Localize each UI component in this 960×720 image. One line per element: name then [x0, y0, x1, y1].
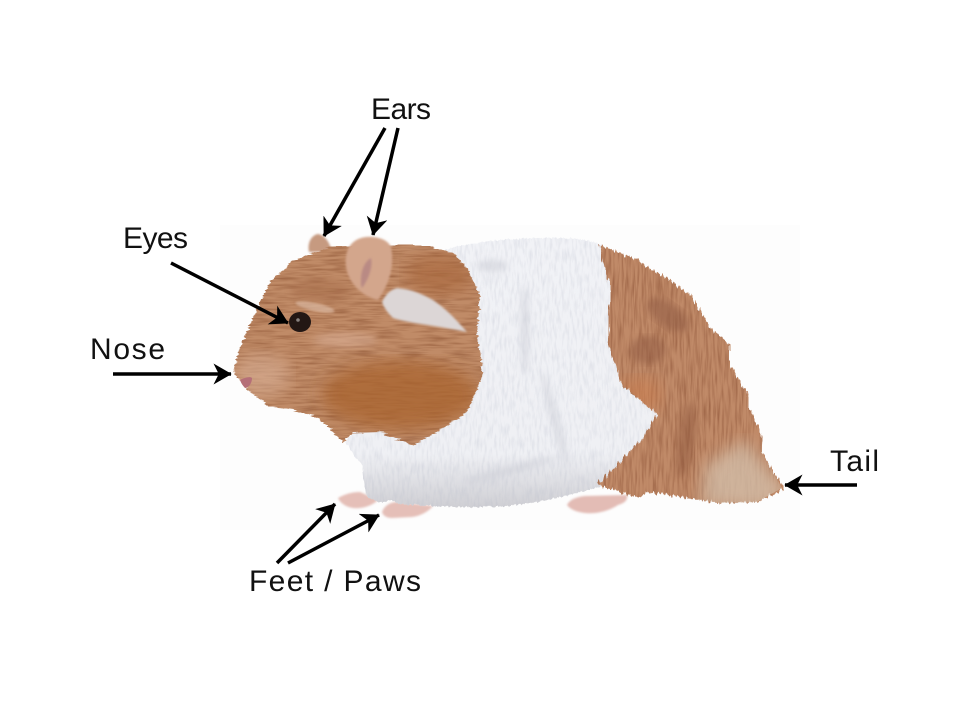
label: Feet / Paws: Feet / Paws: [249, 565, 421, 598]
illustration: hamster: [233, 234, 790, 518]
head fur base: [233, 245, 483, 445]
white fur patch behind ear: [382, 288, 467, 332]
front feet: [338, 492, 433, 518]
eye: [289, 312, 311, 332]
label: Ears: Ears: [371, 93, 431, 126]
arrow: eyes: [171, 263, 288, 323]
rear brown fur: [597, 245, 790, 510]
rear fur shading: [620, 296, 782, 503]
head and shoulder brown fur: [233, 245, 483, 445]
ear outer: [346, 237, 392, 300]
label: Nose: Nose: [90, 333, 165, 366]
nose: [240, 377, 252, 388]
arrow: ears right: [373, 128, 398, 235]
large ear: [346, 237, 392, 300]
head fur shading: [234, 255, 478, 429]
grey shading on white fur: [461, 260, 572, 487]
white body fur: [345, 238, 660, 507]
infographic: hamster anatomy diagram: [92, 98, 878, 592]
hind foot: [567, 495, 627, 513]
label: Tail: Tail: [830, 445, 879, 478]
rear fur base: [597, 245, 784, 503]
arrow: nose: [113, 372, 231, 376]
ear inner: [361, 258, 371, 288]
arrow: front paw: [277, 504, 335, 563]
label: Eyes: Eyes: [123, 222, 188, 255]
image backdrop: [220, 225, 800, 530]
arrow: ears left: [324, 128, 385, 236]
small far ear: [309, 234, 332, 252]
arrow: rear paw: [288, 515, 379, 563]
arrow: tail: [785, 483, 857, 487]
